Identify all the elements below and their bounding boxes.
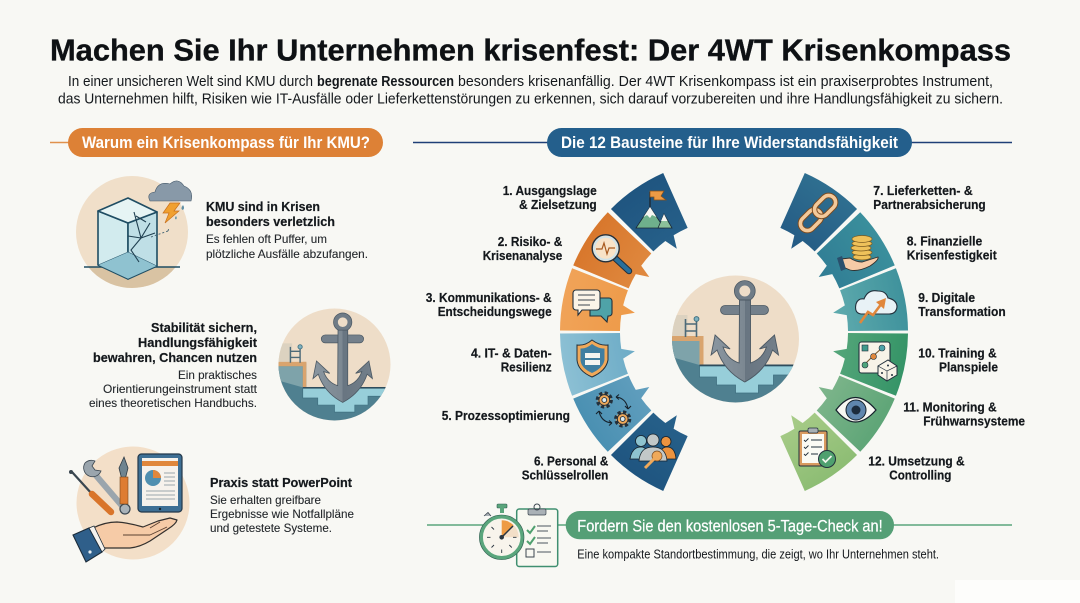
- labels: building blocks 1-6: 4. IT- & Daten-: [471, 347, 552, 361]
- heading: right section: Die 12 Bausteine für Ihre Widerstandsfähigkeit: [561, 134, 898, 152]
- labels: building blocks 1-6: Krisenanalyse: [483, 249, 562, 263]
- text: stability: Orientierungeinstrument statt: [103, 382, 258, 396]
- labels: building blocks 1-6: & Zielsetzung: [519, 198, 597, 212]
- segment 9: [827, 268, 911, 344]
- text: practice: [210, 475, 354, 535]
- callout: 5-day check: [566, 511, 894, 539]
- text: stability: eines theoretischen Handbuchs.: [89, 396, 257, 410]
- intro text: begrenate Ressourcen: [317, 74, 454, 90]
- labels: building blocks 1-6: 5. Prozessoptimierung: [442, 409, 570, 423]
- text: vulnerability: [206, 199, 368, 261]
- labels: building blocks 7-12: Frühwarnsysteme: [923, 415, 1025, 429]
- labels: building blocks 1-6: [426, 184, 608, 483]
- icon: cracked glass cube with storm cloud: [76, 176, 192, 291]
- intro text: das Unternehmen hilft, Risiken wie IT-Ausfälle oder Lieferkettenstörungen zu erkennen, sich darauf vorzubereiten und ihre Handlungsfähigkeit zu sichern.: [58, 92, 1003, 108]
- text: stability: Stabilität sichern,: [151, 320, 257, 335]
- icon: central anchor: [672, 275, 800, 403]
- labels: building blocks 1-6: 6. Personal &: [534, 455, 608, 469]
- intro text: [58, 74, 1003, 108]
- icon: anchor at harbour: [278, 308, 391, 421]
- infographic: [50, 38, 1025, 568]
- text: check description: Eine kompakte Standortbestimmung, die zeigt, wo Ihr Unternehmen steht.: [577, 547, 939, 561]
- segment 7: [765, 171, 859, 267]
- labels: building blocks 7-12: Controlling: [889, 469, 951, 483]
- labels: building blocks 7-12: Krisenfestigkeit: [907, 249, 998, 263]
- labels: building blocks 7-12: 9. Digitale: [918, 291, 975, 305]
- text: practice: Sie erhalten greifbare: [210, 493, 321, 507]
- labels: building blocks 1-6: Resilienz: [501, 361, 552, 375]
- panel: call to action: [427, 504, 1012, 566]
- segment 10: [827, 320, 911, 396]
- panel: stability: [89, 308, 391, 421]
- labels: building blocks 1-6: 2. Risiko- &: [498, 235, 562, 249]
- text: vulnerability: plötzliche Ausfälle abzufangen.: [206, 247, 368, 261]
- labels: building blocks 7-12: 10. Training &: [918, 347, 997, 361]
- panel: practice: [69, 446, 354, 562]
- segment 8: [801, 211, 897, 304]
- segment 4: [557, 320, 641, 396]
- text: stability: Ein praktisches: [178, 368, 257, 382]
- text: practice: Ergebnisse wie Notfallpläne: [210, 507, 354, 521]
- panel: vulnerability: [76, 176, 368, 291]
- labels: building blocks 7-12: 11. Monitoring &: [903, 401, 997, 415]
- segment 1: [609, 171, 703, 267]
- segment 6: [609, 397, 703, 493]
- icon: stopwatch and checklist: [479, 504, 558, 566]
- text: stability: [89, 320, 258, 410]
- labels: building blocks 7-12: Partnerabsicherung: [873, 198, 986, 212]
- heading: right section: [413, 128, 1012, 157]
- heading: left section: [50, 128, 383, 157]
- title: Machen Sie Ihr Unternehmen krisenfest: Der 4WT Krisenkompass: [50, 32, 1011, 68]
- text: practice: Praxis statt PowerPoint: [210, 475, 353, 490]
- segment 12: [765, 397, 859, 493]
- heading: left section: Warum ein Krisenkompass für Ihr KMU?: [82, 134, 370, 152]
- text: vulnerability: besonders verletzlich: [206, 214, 335, 229]
- labels: building blocks 7-12: Transformation: [918, 305, 1006, 319]
- labels: building blocks 7-12: Planspiele: [939, 361, 998, 375]
- labels: building blocks 1-6: 1. Ausgangslage: [503, 184, 597, 198]
- panel: compass ring: [557, 171, 911, 493]
- labels: building blocks 7-12: 8. Finanzielle: [907, 235, 982, 249]
- labels: building blocks 1-6: Schlüsselrollen: [522, 469, 608, 483]
- intro text: besonders krisenanfällig. Der 4WT Krisenkompass ist ein praxiserprobtes Instrument,: [458, 74, 993, 90]
- text: stability: Handlungsfähigkeit: [138, 335, 258, 350]
- labels: building blocks 1-6: Entscheidungswege: [438, 305, 552, 319]
- text: stability: bewahren, Chancen nutzen: [93, 350, 257, 365]
- segment 5: [571, 360, 667, 453]
- segment 2: [571, 211, 667, 304]
- segment 3: [557, 268, 641, 344]
- icon: tools, tablet and open hand: [69, 446, 190, 562]
- text: practice: und getestete Systeme.: [210, 521, 332, 535]
- labels: building blocks 1-6: 3. Kommunikations- &: [426, 291, 552, 305]
- intro text: In einer unsicheren Welt sind KMU durch: [68, 74, 313, 90]
- text: vulnerability: Es fehlen oft Puffer, um: [206, 232, 327, 246]
- labels: building blocks 7-12: [868, 184, 1025, 483]
- segment 11: [801, 360, 897, 453]
- labels: building blocks 7-12: 12. Umsetzung &: [868, 455, 965, 469]
- callout: 5-day check: Fordern Sie den kostenlosen 5-Tage-Check an!: [577, 518, 883, 536]
- labels: building blocks 7-12: 7. Lieferketten- &: [873, 184, 973, 198]
- text: vulnerability: KMU sind in Krisen: [206, 199, 320, 214]
